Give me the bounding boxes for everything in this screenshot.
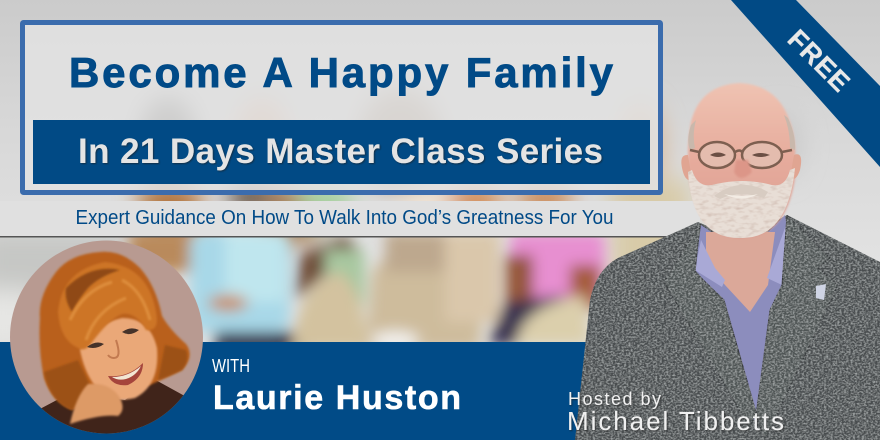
title panel [22, 22, 660, 192]
subtitle: In 21 Days Master Class Series: In 21 Days Master Class Series [78, 132, 603, 171]
title: Become A Happy Family: Become A Happy Family [69, 49, 614, 96]
hair lower shadow [44, 345, 187, 410]
background: blurred family photo [0, 0, 880, 342]
beard [688, 168, 795, 238]
portrait: Michael Tibbetts [575, 83, 880, 440]
hand [70, 384, 123, 424]
moustache [714, 185, 768, 199]
jacket [575, 215, 880, 440]
head [688, 83, 795, 238]
guest name: Laurie Huston [213, 379, 461, 417]
eyes [710, 152, 770, 157]
left lapel [664, 224, 756, 428]
lapel pin [816, 284, 826, 300]
portrait: Laurie Huston [10, 240, 204, 440]
nose [734, 160, 752, 178]
temple hair [688, 115, 795, 150]
WITH label: WITH [212, 356, 250, 376]
hair crown shadow [66, 269, 120, 312]
face [80, 318, 157, 400]
right lapel [756, 215, 838, 440]
bottom blue band [0, 342, 600, 440]
blouse [41, 380, 184, 434]
shirt [695, 215, 790, 420]
nose shadow [108, 340, 119, 358]
collar flaps [695, 225, 788, 287]
tagline text: Expert Guidance On How To Walk Into God’s Greatness For You [76, 207, 614, 229]
eyes [87, 328, 139, 348]
glasses [690, 142, 792, 168]
hair highlight strands [70, 280, 150, 340]
mouth [724, 194, 758, 198]
FREE text: FREE [782, 24, 856, 98]
free ribbon [731, 0, 880, 167]
smile [108, 363, 143, 385]
tagline strip [0, 201, 700, 238]
host name: Michael Tibbetts [567, 406, 784, 436]
subtitle bar [33, 120, 650, 184]
left lens [699, 142, 735, 168]
right lens [742, 142, 782, 168]
host label: Hosted by [568, 389, 661, 409]
neck [706, 232, 775, 312]
bridge and arms [690, 150, 792, 152]
hair mass [40, 252, 190, 410]
ears [681, 154, 801, 180]
hair fringe [58, 262, 157, 349]
